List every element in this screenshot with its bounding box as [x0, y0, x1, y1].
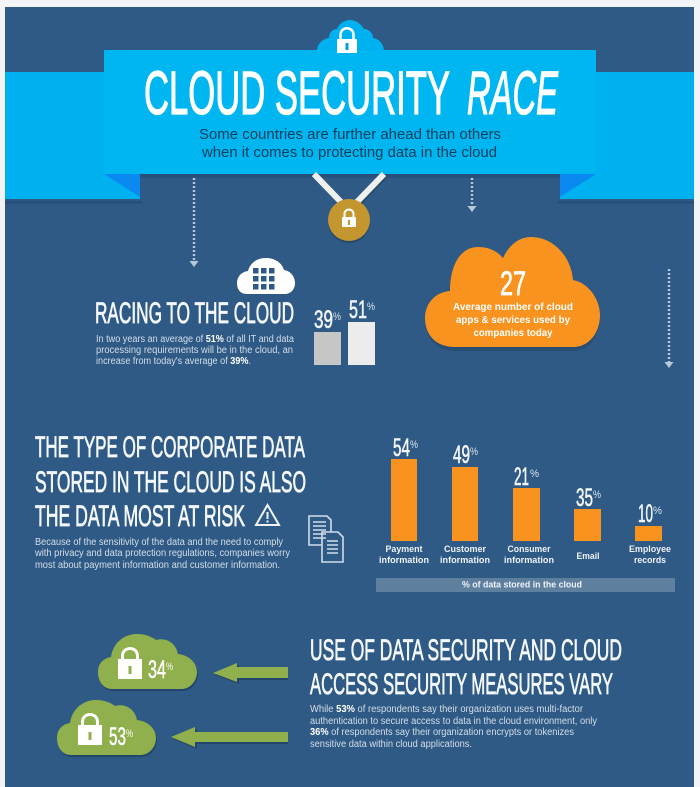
arrow: dotted right	[664, 269, 674, 368]
bar chart: 39 and 51 percent: 51	[349, 296, 367, 324]
callout: orange cloud 27: Average number of cloud	[453, 301, 573, 313]
title: RACE	[467, 59, 559, 127]
bar: consumer information: information	[504, 555, 554, 566]
text block: racing to the cloud: increase from today's average of 39%.	[96, 356, 251, 367]
bar: employee records: %	[653, 505, 662, 517]
text block: data security measures: 36% of respondents say their organization encrypts or tokenizes	[310, 727, 574, 738]
icon: warning triangle	[256, 505, 279, 525]
text block: racing to the cloud: In two years an average of 51% of all IT and data	[96, 334, 294, 345]
text block: corporate data	[34, 537, 290, 571]
heading: racing to the cloud: RACING TO THE CLOUD	[95, 297, 294, 330]
text block: data security measures: sensitive data within cloud applications.	[310, 739, 472, 750]
icon: medal with padlock	[314, 174, 386, 243]
bar: customer information: information	[440, 555, 490, 566]
bar: employee records: 10	[638, 500, 653, 528]
bar: customer information: %	[470, 446, 478, 458]
bar chart: 39 and 51 percent: 39	[314, 306, 333, 334]
icon: documents	[309, 516, 343, 562]
bar chart: 39 and 51 percent	[314, 296, 375, 365]
icon: green cloud 34 percent: %	[166, 661, 173, 673]
bar: payment information	[379, 434, 429, 566]
bar: customer information	[440, 441, 490, 566]
callout: orange cloud 27: apps & services used by	[456, 314, 570, 326]
heading: type of corporate data	[35, 431, 306, 533]
heading: data security measures	[310, 634, 622, 701]
bar: email	[574, 484, 601, 562]
text block: data security measures: While 53% of respondents say their organization uses multi-factor	[310, 704, 584, 715]
icon: green cloud 53 percent: %	[126, 728, 133, 740]
text block: corporate data: with privacy and data protection regulations, companies worry	[34, 548, 290, 559]
heading: type of corporate data: THE DATA MOST AT RISK	[35, 500, 245, 533]
bar: consumer information	[504, 463, 554, 566]
bar chart: 39 and 51 percent: %	[333, 311, 341, 323]
icon: green cloud 53 percent	[57, 700, 157, 757]
bar: consumer information: Consumer	[508, 544, 551, 555]
callout: orange cloud 27	[425, 237, 600, 351]
arrow: dotted left	[190, 178, 198, 267]
bar: payment information: %	[410, 439, 418, 451]
heading: type of corporate data: STORED IN THE CLOUD IS ALSO	[35, 466, 306, 499]
icon: green cloud 53 percent: 53	[109, 723, 126, 751]
arrow: dotted centre	[468, 178, 476, 212]
bar: employee records: Employee	[629, 544, 671, 555]
bar: email: 35	[576, 484, 593, 512]
bar: email: %	[593, 489, 601, 501]
bar: email: Email	[576, 551, 600, 562]
text block: data security measures: authentication to secure access to data in the cloud environment, only	[310, 716, 597, 727]
text block: corporate data: Because of the sensitivity of the data and the need to comply	[35, 537, 283, 548]
icon: green cloud 34 percent	[98, 634, 198, 691]
subtitle: Some countries are further ahead than others	[199, 126, 501, 143]
chart caption band: % of data stored in the cloud	[462, 580, 582, 590]
text block: data security measures	[310, 704, 597, 750]
heading: type of corporate data: THE TYPE OF CORPORATE DATA	[35, 431, 305, 464]
bar chart: 39 and 51 percent: %	[367, 301, 375, 313]
bar: customer information: 49	[453, 441, 470, 469]
icon: cloud with grid	[237, 258, 295, 294]
text block: racing to the cloud	[96, 334, 294, 367]
callout: orange cloud 27: 27	[500, 265, 526, 303]
subtitle: when it comes to protecting data in the cloud	[201, 144, 497, 161]
subtitle	[199, 126, 501, 161]
text block: racing to the cloud: processing requirements will be in the cloud, an	[96, 345, 293, 356]
banner panel	[104, 50, 596, 174]
bar: payment information: 54	[393, 434, 410, 462]
bar: consumer information: 21	[514, 463, 529, 491]
cloud behind padlock	[317, 20, 384, 52]
bar: employee records	[629, 500, 671, 566]
bar: employee records: records	[634, 555, 666, 566]
title: CLOUD SECURITY	[144, 59, 450, 127]
arrow: green upper	[213, 663, 288, 684]
icon: green cloud 34 percent: 34	[148, 656, 166, 684]
arrow: green lower	[171, 727, 288, 749]
bar: customer information: Customer	[444, 544, 486, 555]
text block: corporate data: most about payment information and customer information.	[35, 560, 280, 571]
bar: payment information: information	[379, 555, 429, 566]
bar: consumer information: %	[530, 468, 539, 480]
callout: orange cloud 27: companies today	[474, 327, 553, 339]
chart caption band	[376, 578, 675, 592]
bar chart: data stored in the cloud	[376, 434, 675, 592]
header ribbon	[5, 20, 694, 204]
bar: payment information: Payment	[386, 544, 423, 555]
icon: padlock	[337, 28, 357, 53]
